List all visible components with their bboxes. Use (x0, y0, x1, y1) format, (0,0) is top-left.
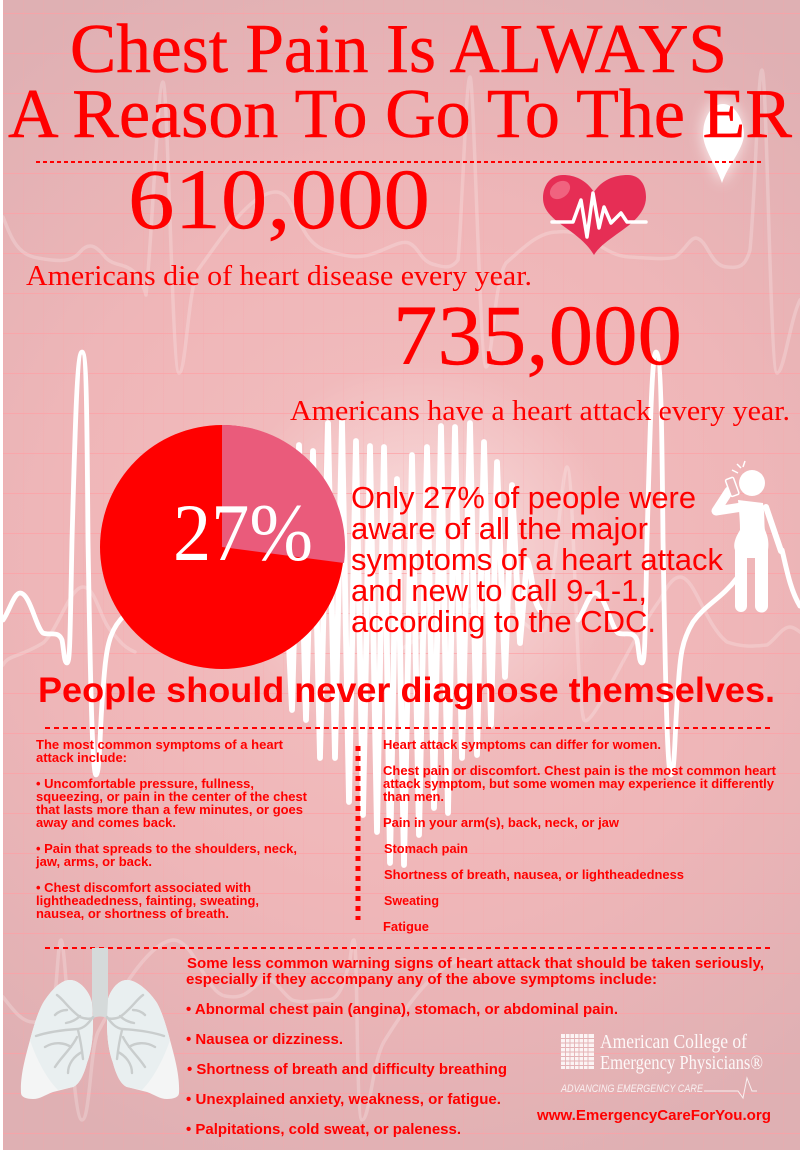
logo: American College of Emergency Physicians (560, 1031, 763, 1098)
text block: less common warning signs: especially if they accompany any of the above symptoms include: (186, 972, 657, 988)
text block: symptoms in women: Heart attack symptoms can differ for women. (383, 737, 661, 752)
website link: www.EmergencyCareForYou.org (536, 1107, 771, 1124)
bold white ECG wave (3, 352, 800, 865)
text block: common symptoms: attack include: (36, 750, 127, 765)
caption: heart disease deaths: Americans die of heart disease every year. (26, 260, 532, 292)
text block: less common warning signs (186, 956, 764, 1138)
logo: American College of Emergency Physicians: ADVANCING EMERGENCY CARE (560, 1083, 704, 1095)
logo: American College of Emergency Physicians: American College of (600, 1031, 747, 1053)
text block: awareness statistic: according to the CDC. (351, 604, 656, 639)
title: A Reason To Go To The ER (8, 76, 792, 153)
text block: awareness statistic: aware of all the major (351, 511, 648, 546)
text block: common symptoms: lightheadedness, fainting, sweating, (36, 893, 259, 908)
text block: less common warning signs: • Nausea or dizziness. (186, 1032, 343, 1048)
statistic: 735,000: 735,000 (393, 287, 682, 383)
divider: lower dashed line (45, 947, 770, 949)
divider: top dashed line (36, 161, 763, 163)
text block: less common warning signs: • Abnormal chest pain (angina), stomach, or abdominal pain. (186, 1002, 618, 1018)
text block: common symptoms: nausea, or shortness of breath. (36, 906, 229, 921)
text block: less common warning signs: • Palpitations, cold sweat, or paleness. (186, 1122, 461, 1138)
divider: vertical dotted line (356, 746, 360, 920)
text block: symptoms in women: attack symptom, but some women may experience it differently (383, 776, 775, 791)
text block: symptoms in women: Stomach pain (384, 841, 468, 856)
text block: awareness statistic: and new to call 9-1-1, (351, 573, 647, 608)
text block: symptoms in women: Sweating (384, 893, 439, 908)
text block: common symptoms: jaw, arms, or back. (35, 854, 152, 869)
white glowing drop (702, 100, 744, 184)
text block: common symptoms: squeezing, or pain in the center of the chest (36, 789, 308, 804)
text block: awareness statistic: Only 27% of people were (351, 480, 696, 515)
title (8, 11, 792, 153)
caption: heart attacks: Americans have a heart attack every year. (290, 395, 790, 427)
divider: middle dashed line (45, 727, 770, 729)
text block: common symptoms: • Pain that spreads to the shoulders, neck, (36, 841, 297, 856)
text block: common symptoms: away and comes back. (36, 815, 176, 830)
text block: less common warning signs: Some less common warning signs of heart attack that should be taken seriously, (187, 956, 764, 972)
heading: never diagnose: People should never diagnose themselves. (38, 671, 775, 710)
text block: common symptoms: • Uncomfortable pressure, fullness, (36, 776, 254, 791)
text block: symptoms in women: Pain in your arm(s), back, neck, or jaw (383, 815, 620, 830)
text block: common symptoms: The most common symptoms of a heart (36, 737, 284, 752)
text block: awareness statistic: symptoms of a heart attack (351, 542, 723, 577)
text block: symptoms in women (383, 737, 777, 934)
text block: symptoms in women: Chest pain or discomfort. Chest pain is the most common heart (383, 763, 777, 778)
pie chart: 27% (100, 425, 345, 669)
text block: symptoms in women: Shortness of breath, nausea, or lightheadedness (384, 867, 684, 882)
text block: less common warning signs: • Unexplained anxiety, weakness, or fatigue. (186, 1092, 501, 1108)
text block: awareness statistic (351, 480, 723, 639)
pie chart: 27%: 27% (173, 487, 313, 578)
icon: lungs (21, 948, 179, 1099)
logo: American College of Emergency Physicians: Emergency Physicians® (600, 1052, 763, 1074)
text block: less common warning signs: • Shortness of breath and difficulty breathing (187, 1062, 507, 1078)
text block: symptoms in women: than men. (383, 789, 444, 804)
icon: person on phone (716, 461, 781, 612)
text block: common symptoms: that lasts more than a few minutes, or goes (36, 802, 303, 817)
title: Chest Pain Is ALWAYS (70, 11, 727, 88)
text block: common symptoms (35, 737, 308, 921)
statistic: 610,000: 610,000 (128, 151, 430, 247)
icon: heart with pulse (543, 175, 646, 255)
text block: symptoms in women: Fatigue (383, 919, 429, 934)
text block: common symptoms: • Chest discomfort associated with (36, 880, 251, 895)
